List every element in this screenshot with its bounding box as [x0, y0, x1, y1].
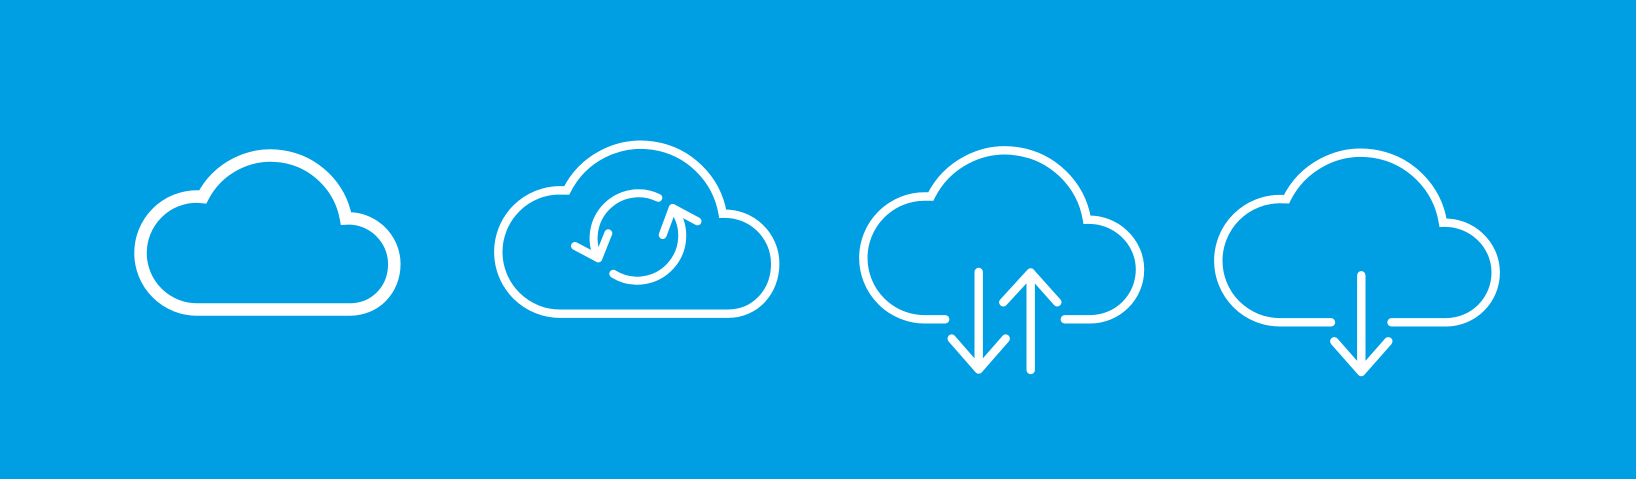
icon: cloud with upload and download arrows	[863, 150, 1140, 370]
sync arrow: counter-clockwise lower	[613, 208, 698, 281]
arrow: upload	[1003, 272, 1057, 370]
icon: cloud with sync arrows	[498, 145, 775, 314]
cloud outline	[863, 150, 1140, 319]
icon: plain cloud	[140, 156, 394, 310]
sync arrow: counter-clockwise upper	[575, 193, 658, 258]
icon: cloud with download arrow	[1218, 153, 1496, 372]
arrow: download	[952, 272, 1006, 370]
cloud outline	[1218, 153, 1496, 322]
cloud outline	[498, 145, 775, 314]
arrow: download	[1334, 275, 1388, 372]
